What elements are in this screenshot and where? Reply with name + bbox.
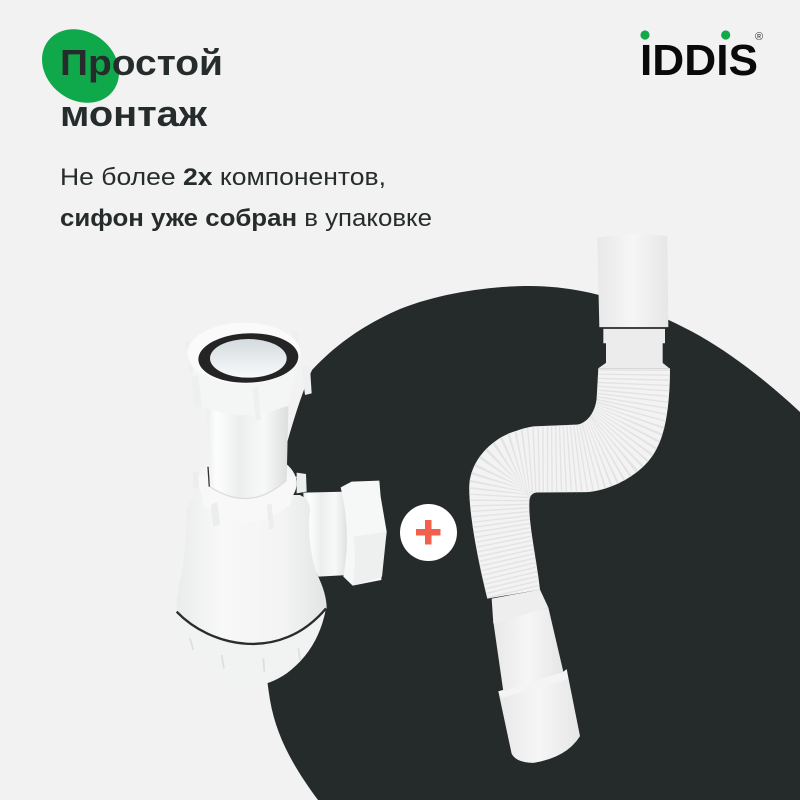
title: монтаж	[60, 93, 208, 134]
bellows ribs	[498, 365, 634, 604]
hose neck	[492, 590, 548, 624]
side outlet nut	[341, 481, 387, 586]
top cup	[597, 234, 668, 327]
side outlet pipe	[303, 492, 348, 577]
vertical tube	[207, 407, 288, 499]
description text	[60, 164, 432, 232]
black gasket	[198, 332, 299, 384]
black seal ring	[177, 608, 326, 644]
corrugated flexible hose	[469, 234, 670, 763]
title	[60, 42, 223, 134]
plus badge	[400, 504, 457, 561]
title: Простой	[60, 42, 223, 83]
rim	[187, 323, 301, 384]
bottom connector	[498, 669, 580, 763]
bellows body	[469, 368, 670, 599]
description text: Не более 2х компонентов,	[60, 164, 386, 191]
bottom cap	[177, 608, 326, 686]
description text: сифон уже собран в упаковке	[60, 205, 432, 232]
bottle siphon	[177, 323, 387, 686]
siphon bowl	[177, 495, 327, 644]
neck rings	[598, 329, 669, 368]
green blob accent	[27, 14, 134, 118]
lower sleeve	[493, 607, 563, 691]
dark background shape	[263, 286, 800, 800]
lower collar nut	[193, 452, 307, 530]
IDDIS logo: IDDIS	[640, 36, 758, 85]
pipe opening	[210, 339, 287, 378]
top nut	[185, 330, 312, 421]
IDDIS logo: ®	[755, 31, 763, 43]
